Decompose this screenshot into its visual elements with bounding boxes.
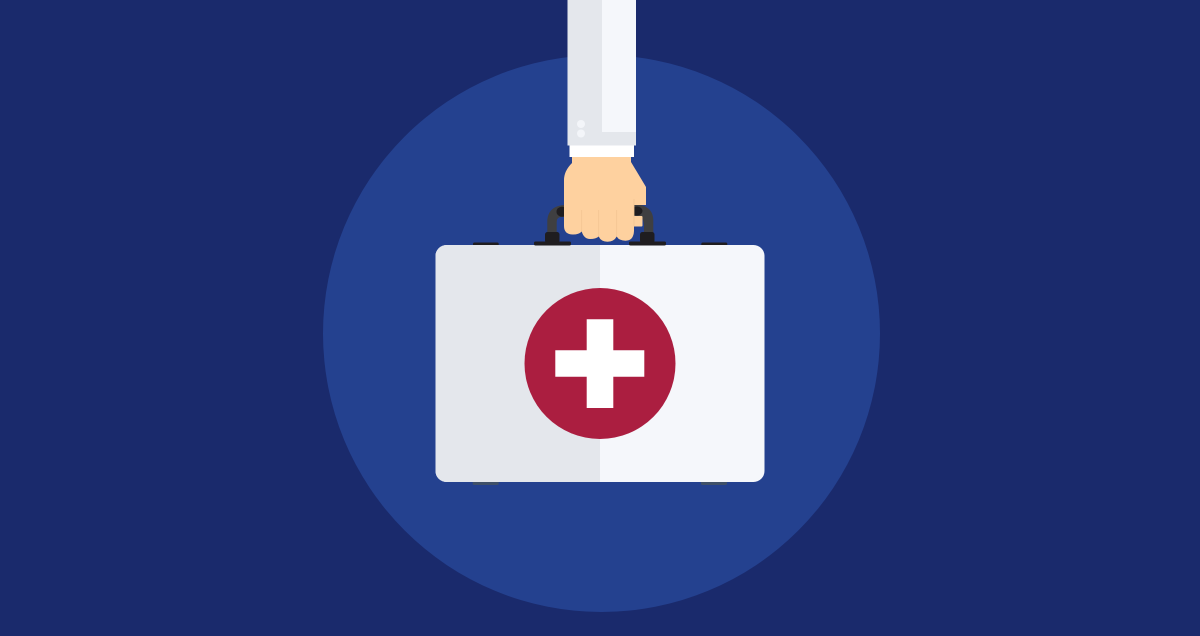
briefcase feet: top: [473, 242, 727, 248]
briefcase feet: bottom: [473, 480, 727, 485]
thumb: [632, 216, 642, 226]
shirt cuff: [570, 146, 634, 157]
red circle: [524, 288, 676, 439]
medical emblem: [524, 288, 676, 439]
palm and fingers: [564, 157, 646, 242]
finger lines: [582, 199, 634, 236]
handle arches: [547, 204, 653, 234]
sleeve buttons: [577, 120, 585, 138]
sleeve shaded side: [568, 0, 636, 146]
background circle: [323, 55, 880, 612]
briefcase body: [436, 245, 764, 482]
sleeve light side: [602, 0, 636, 132]
sleeve: [568, 0, 636, 146]
case shaded left half: [436, 245, 600, 482]
case outline: [436, 245, 764, 482]
white cross: [555, 319, 644, 408]
handle posts and bases: [534, 232, 666, 246]
grip ovals: [556, 206, 642, 217]
briefcase handle: [534, 204, 666, 246]
hand: [564, 157, 646, 242]
